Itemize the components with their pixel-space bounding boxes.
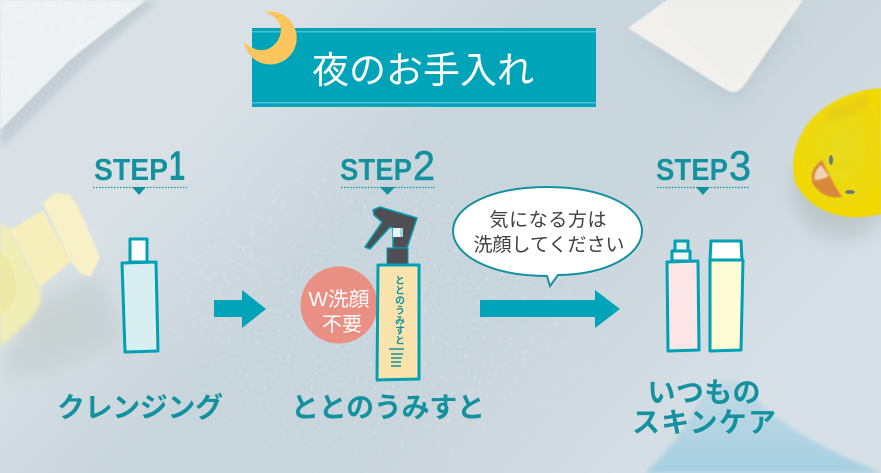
badge: no double cleansing: 不要 <box>322 314 362 336</box>
step 2 label <box>340 142 435 195</box>
step 1 label: 1 <box>169 142 185 189</box>
photo: towel top left <box>0 0 160 150</box>
icon: lotion bottle <box>667 241 699 351</box>
photo: rubber duck <box>792 88 881 239</box>
icon: cleansing bottle <box>122 239 158 352</box>
arrow: step 2 to step 3 <box>480 290 620 328</box>
badge: no double cleansing <box>300 266 378 344</box>
label: usual skincare: スキンケア <box>632 407 776 438</box>
label: totonou mist: ととのうみすと <box>291 392 485 423</box>
step 2 label: STEP <box>340 152 412 187</box>
heading: night care: 夜のお手入れ <box>312 50 534 91</box>
icon: crescent moon <box>244 11 297 64</box>
speech bubble: 洗顔してください <box>474 234 624 256</box>
photo: plaster texture <box>204 176 557 421</box>
label: cleansing: クレンジング <box>57 391 223 423</box>
product name on bottle: ととのうみすと <box>392 275 404 345</box>
step 3 label <box>656 142 751 195</box>
step 3 label: 3 <box>729 142 751 189</box>
label: usual skincare <box>632 377 776 438</box>
icon: cream bottle <box>710 241 743 351</box>
step 3 label: STEP <box>656 152 728 187</box>
step 1 label <box>93 142 187 195</box>
title banner <box>252 28 596 107</box>
speech bubble <box>453 187 642 286</box>
step 1 label: STEP <box>94 152 168 187</box>
photo: blue towel bottom right <box>645 380 881 473</box>
icon: spray bottle <box>365 207 419 380</box>
speech bubble: 気になる方は <box>490 209 606 231</box>
label: usual skincare: いつもの <box>648 377 760 408</box>
badge: no double cleansing: W洗顔 <box>308 288 370 311</box>
step 2 label: 2 <box>413 142 435 189</box>
arrow: step 1 to step 2 <box>214 290 266 328</box>
photo: soap dish top right <box>628 0 803 105</box>
photo: oil bottle left <box>0 193 120 375</box>
